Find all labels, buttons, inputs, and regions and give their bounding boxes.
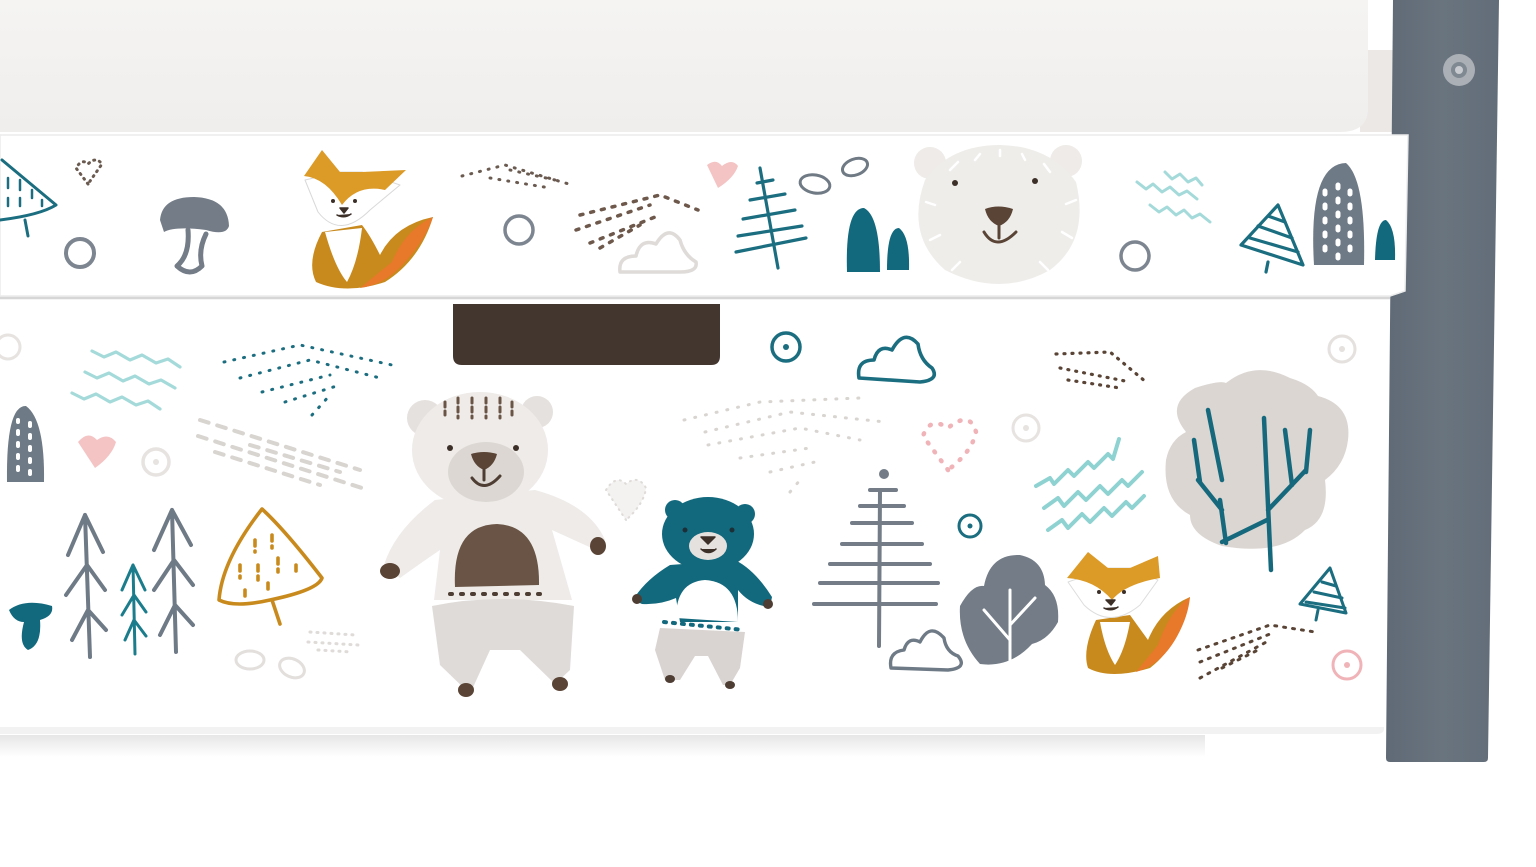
icon: bear head on rail [914,145,1082,284]
icon: fir trees [66,510,193,657]
rail pattern [0,145,1395,288]
icon: mint waves right [1036,439,1144,530]
icon: teal small target [959,515,981,537]
bed post [1386,0,1499,762]
panel: lower drawer [0,300,1388,734]
icon: teal hills [847,208,909,272]
icon: ring right [1121,242,1149,270]
icon: teal cloud [859,337,934,382]
icon: heart left [78,435,116,468]
icon: dotted grey hill [1313,163,1364,265]
brown dashes bottom right [1198,625,1315,678]
icon: ring center [505,216,533,244]
icon: cloud outline [620,233,696,272]
drawer handle cutout [453,304,720,365]
icon: dotted small heart [606,480,646,520]
icon: mint waves left [72,351,180,409]
icon: screw [1443,54,1475,86]
icon: fox on drawer [1067,552,1190,674]
icon: pink heart [707,162,738,188]
drawer pattern [0,333,1361,697]
icon: pale ring top right [1329,336,1355,362]
icon: teal bear [632,497,773,689]
icon: teal mushroom [9,603,52,650]
icon: teal target [772,333,800,361]
icon: large beige tree [1166,370,1348,570]
pale dots bottom [308,632,358,652]
brown dashes [576,195,698,248]
icon: pale footprints [236,651,308,682]
icon: footprints [799,155,870,195]
icon: striped grey fir tree [814,471,938,646]
icon: ring [66,239,94,267]
mattress [0,0,1394,132]
icon: mint waves [1137,172,1210,222]
icon: grey hill left [7,406,44,482]
icon: small striped tree [1300,568,1346,620]
icon: small teal hill [1375,220,1395,260]
icon: striped triangle tree [1241,205,1303,272]
icon: yellow triangle tree [219,509,322,624]
icon: pink ring [1333,651,1361,679]
beige dashes [198,420,362,488]
brown dots right [1056,352,1146,388]
icon: small cloud outline [891,631,961,670]
icon: pale ring mid [1013,415,1039,441]
icon: fox on rail [304,150,433,288]
icon: dotted heart [76,160,102,184]
dots cluster [462,165,572,188]
icon: big bear [380,392,606,697]
icon: fir tree [736,168,806,268]
icon: dotted pink heart [923,420,976,470]
panel: upper rail [0,135,1408,298]
icon: teal triangle tree left [0,160,56,236]
pale dots centre [684,398,885,492]
icon: grey bushy tree [960,555,1058,678]
icon: pale ring left [0,335,20,359]
icon: pale ring [143,449,169,475]
teal dots [224,345,392,415]
icon: mushroom [160,197,229,272]
floor shadow [0,735,1205,757]
